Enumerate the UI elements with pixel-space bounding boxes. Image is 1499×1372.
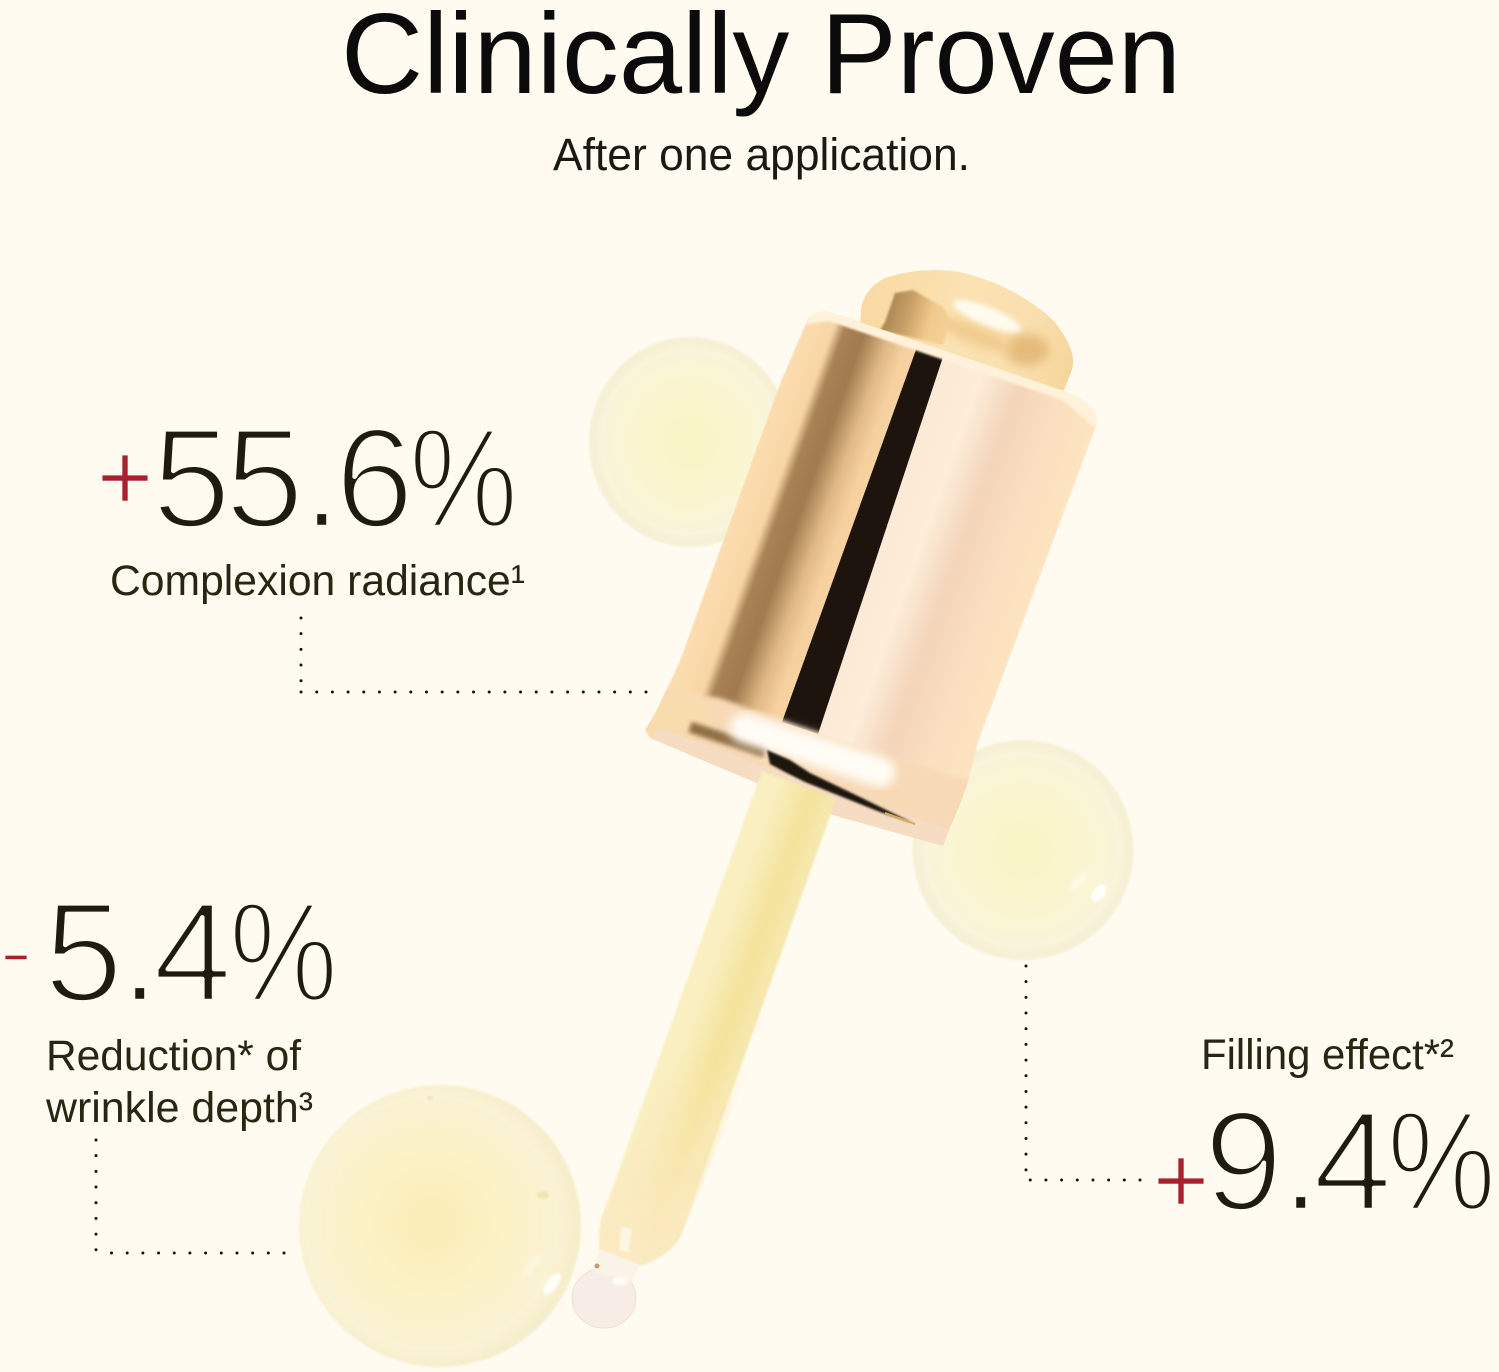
stat: complexion radiance: Complexion radiance¹ [110, 557, 525, 605]
stat: filling effect: 9 [1204, 1082, 1283, 1241]
stat: wrinkle depth: wrinkle depth³ [45, 1084, 313, 1132]
stat: wrinkle depth: 4 [153, 873, 232, 1032]
stat: filling effect: . [1281, 1082, 1320, 1241]
stat: complexion radiance: 6 [335, 399, 414, 558]
stat: complexion radiance [97, 399, 525, 605]
connector: filling effect [1026, 966, 1140, 1180]
connector: complexion radiance [301, 618, 646, 692]
connector: wrinkle depth [96, 1140, 284, 1253]
dropper: gold dome [860, 270, 1073, 395]
stat: wrinkle depth: - [0, 915, 32, 989]
stat: filling effect: + [1153, 1127, 1209, 1234]
stat: wrinkle depth: 5 [44, 873, 123, 1032]
dropper: glass tube and tip [572, 771, 836, 1328]
stat: complexion radiance: . [302, 399, 341, 558]
stat: filling effect: Filling effect*² [1201, 1031, 1454, 1079]
stat: filling effect [1153, 1031, 1496, 1241]
stat: filling effect: 4 [1313, 1082, 1392, 1241]
stat: wrinkle depth: Reduction* of [46, 1032, 302, 1080]
stat: complexion radiance: 5 [225, 399, 304, 558]
stat: wrinkle depth [0, 873, 338, 1132]
stat: complexion radiance: % [409, 399, 518, 558]
stat: complexion radiance: + [97, 424, 153, 531]
droplet: lower [299, 1085, 581, 1367]
stat: complexion radiance: 5 [152, 399, 231, 558]
subtitle: After one application. [553, 129, 970, 180]
dropper: metallic collar [630, 312, 1100, 860]
droplet: upper left [589, 337, 791, 547]
stat: wrinkle depth: % [229, 873, 338, 1032]
stat: wrinkle depth: . [120, 873, 159, 1032]
droplet: right [912, 740, 1134, 960]
